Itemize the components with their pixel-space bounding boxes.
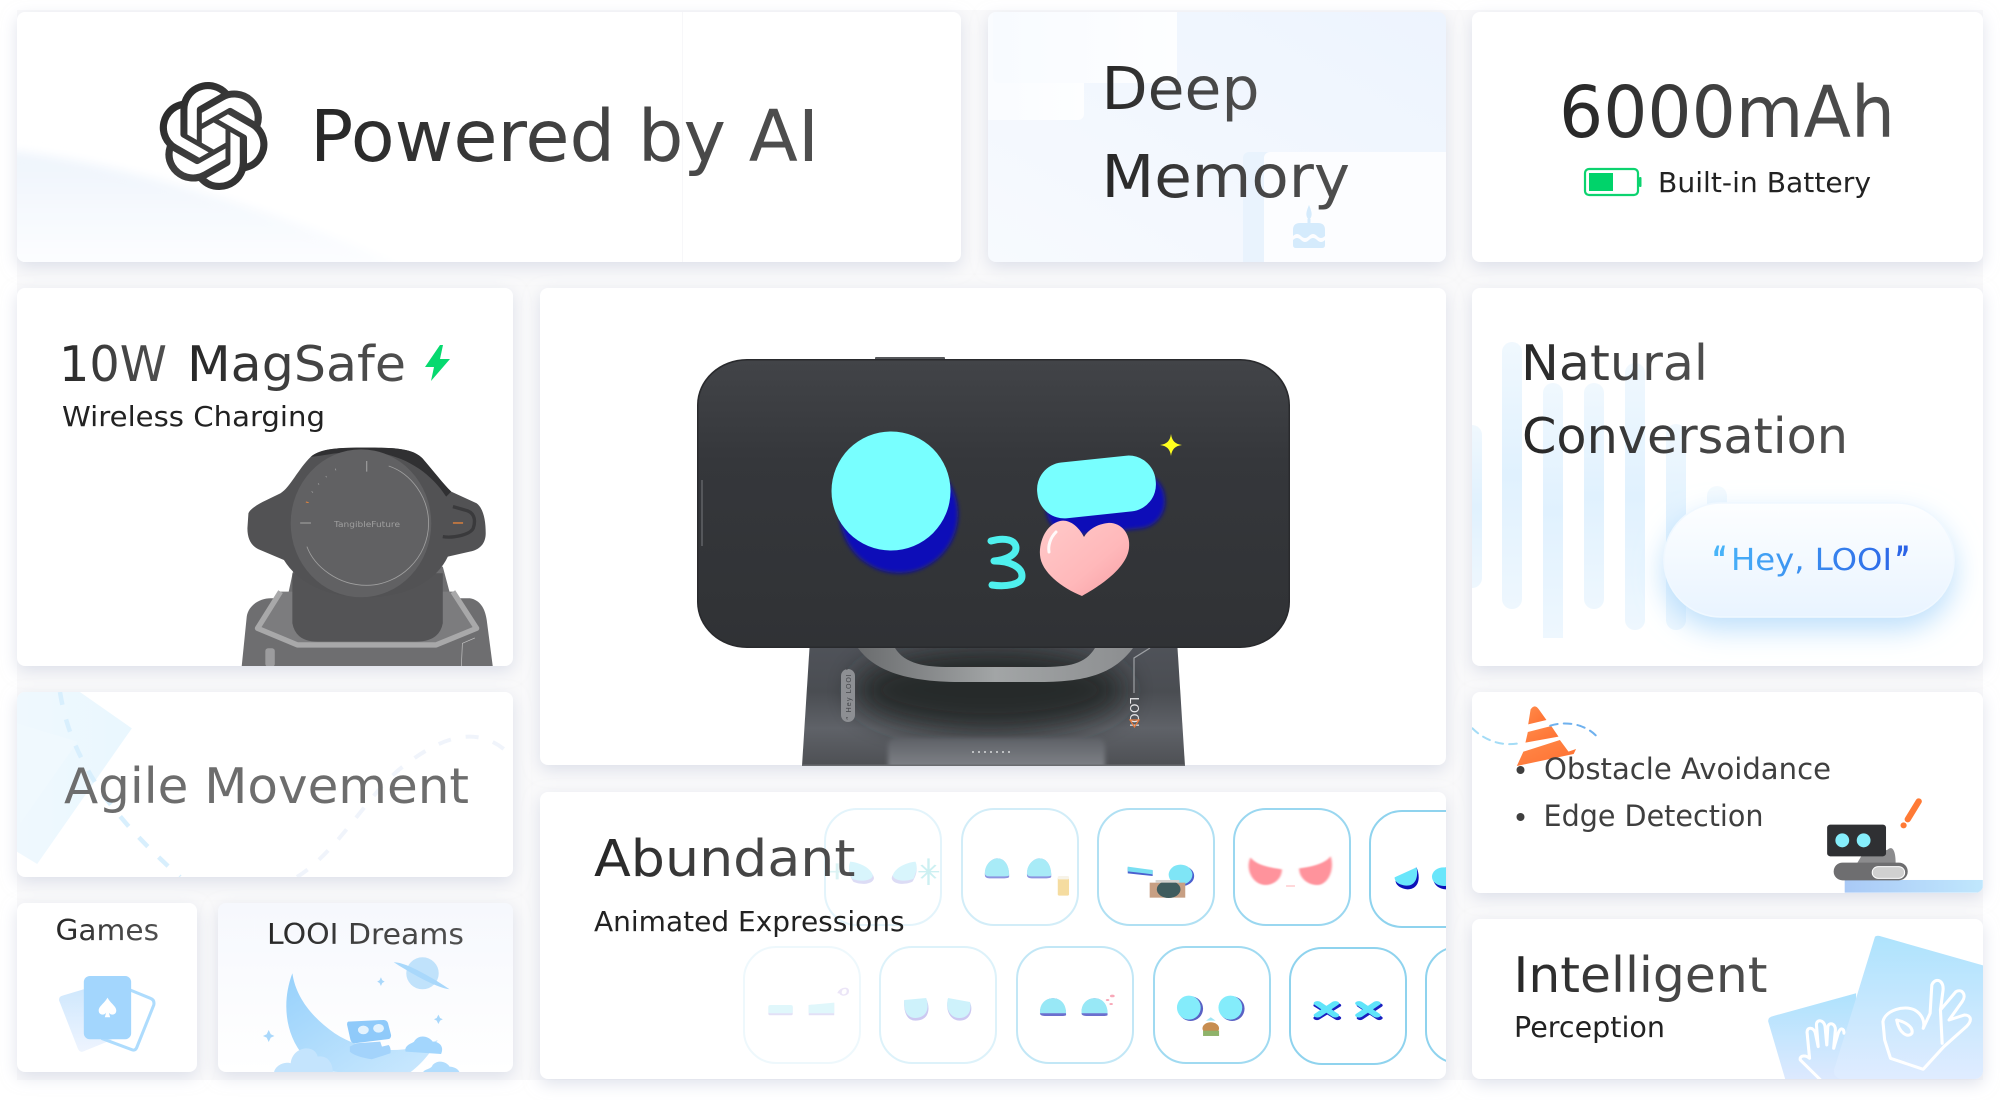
heading: Powered by AI: Powered by AI — [310, 95, 819, 178]
callout: Hey, LOOI: “ — [1712, 539, 1727, 579]
path: dashed route — [1472, 723, 1599, 744]
label: device brand: TangibleFuture — [333, 520, 400, 529]
illustration: charger head — [242, 448, 493, 667]
panel: Abundant Animated Expressions — [540, 792, 1542, 1079]
heading: Natural Conversation: Natural — [1521, 335, 1708, 392]
gallery: expression tiles — [743, 808, 1446, 1065]
panel: Agile Movement — [17, 692, 513, 877]
callout: Hey, LOOI: Hey, LOOI — [1731, 543, 1892, 578]
face: blue half eyes — [1394, 867, 1446, 890]
panel: Games — [17, 903, 197, 1072]
heading: 10W MagSafe: MagSafe — [187, 336, 406, 393]
illustration: robot base: LOOI — [1127, 697, 1141, 727]
heading: Deep Memory: Memory — [1102, 142, 1350, 211]
illustration: phone — [697, 357, 1290, 648]
subheading: Animated Expressions: Animated Expressions — [594, 906, 905, 938]
chart: voice waveform bars — [1462, 342, 1727, 638]
list: features — [1516, 752, 1831, 833]
callout: Hey, LOOI — [1664, 503, 1954, 617]
heading: Natural Conversation: Conversation — [1522, 408, 1848, 465]
panel: Obstacle Avoidance — [1472, 692, 1983, 893]
icon: birthday cake — [1293, 205, 1325, 248]
icon: gesture cards — [1768, 936, 1985, 1080]
panel: Natural Conversation — [1462, 288, 1983, 666]
face: left eye — [832, 432, 958, 573]
icon: playing cards — [59, 976, 154, 1052]
heading: 10W MagSafe: 10W — [59, 336, 167, 393]
icon: charging bolt — [425, 345, 450, 381]
heading: Abundant: Abundant — [594, 830, 856, 889]
face: sparkle — [1160, 434, 1182, 456]
heading: Natural Conversation — [1521, 335, 1848, 465]
face: hearts eyes — [1040, 995, 1115, 1016]
face: sleepy eyes — [768, 988, 848, 1015]
face: snowflake eyes — [829, 858, 939, 885]
icon: robot alert — [1827, 801, 1919, 880]
panel: 10W MagSafe — [17, 288, 513, 667]
subheading: Built-in Battery: Built-in Battery — [1658, 167, 1871, 199]
heading: Deep Memory — [1102, 54, 1350, 211]
subheading: Perception: Perception — [1514, 1011, 1665, 1044]
face: beer eyes — [985, 858, 1069, 896]
panel: LOOI Dreams — [218, 903, 513, 1073]
icon: traffic cone — [1517, 706, 1576, 766]
illustration: robot base: “ Hey LOOI ” — [845, 666, 853, 720]
face: burger eyes — [1177, 996, 1245, 1036]
heading: Intelligent: Intelligent — [1514, 947, 1768, 1004]
panel: Powered by AI — [0, 12, 961, 270]
panel: Deep Memory — [984, 12, 1450, 272]
panel: Intelligent Perception — [1472, 919, 1985, 1080]
heading: LOOI Dreams: LOOI Dreams — [267, 918, 464, 951]
list: features: Edge Detection — [1544, 799, 1764, 833]
heading: 6000mAh: 6000mAh — [1559, 71, 1895, 154]
heading: Deep Memory: Deep — [1102, 54, 1260, 123]
face: crossed eyes — [1317, 1003, 1379, 1018]
icon: battery — [1585, 169, 1642, 195]
heading: 10W MagSafe — [59, 336, 406, 393]
illustration: robot base — [802, 648, 1185, 766]
subheading: Wireless Charging: Wireless Charging — [62, 401, 325, 433]
illustration: moon and robot — [263, 957, 460, 1073]
face: angry red eyes — [1249, 856, 1332, 885]
floor block — [1845, 880, 1983, 893]
face: camera eyes — [1128, 865, 1194, 898]
face: skeptical eyes — [904, 998, 971, 1021]
face: mouth — [991, 539, 1022, 586]
list: features: Obstacle Avoidance — [1544, 752, 1831, 786]
face: right eye — [1034, 453, 1168, 538]
panel: 6000mAh battery — [1472, 12, 1983, 262]
face: heart — [1040, 521, 1129, 596]
panel: robot with phone face — [540, 288, 1446, 772]
callout: Hey, LOOI: ” — [1895, 539, 1910, 579]
heading: Agile Movement: Agile Movement — [64, 758, 469, 815]
heading: Games: Games — [56, 914, 159, 947]
icon: AI knot logo — [160, 82, 267, 190]
